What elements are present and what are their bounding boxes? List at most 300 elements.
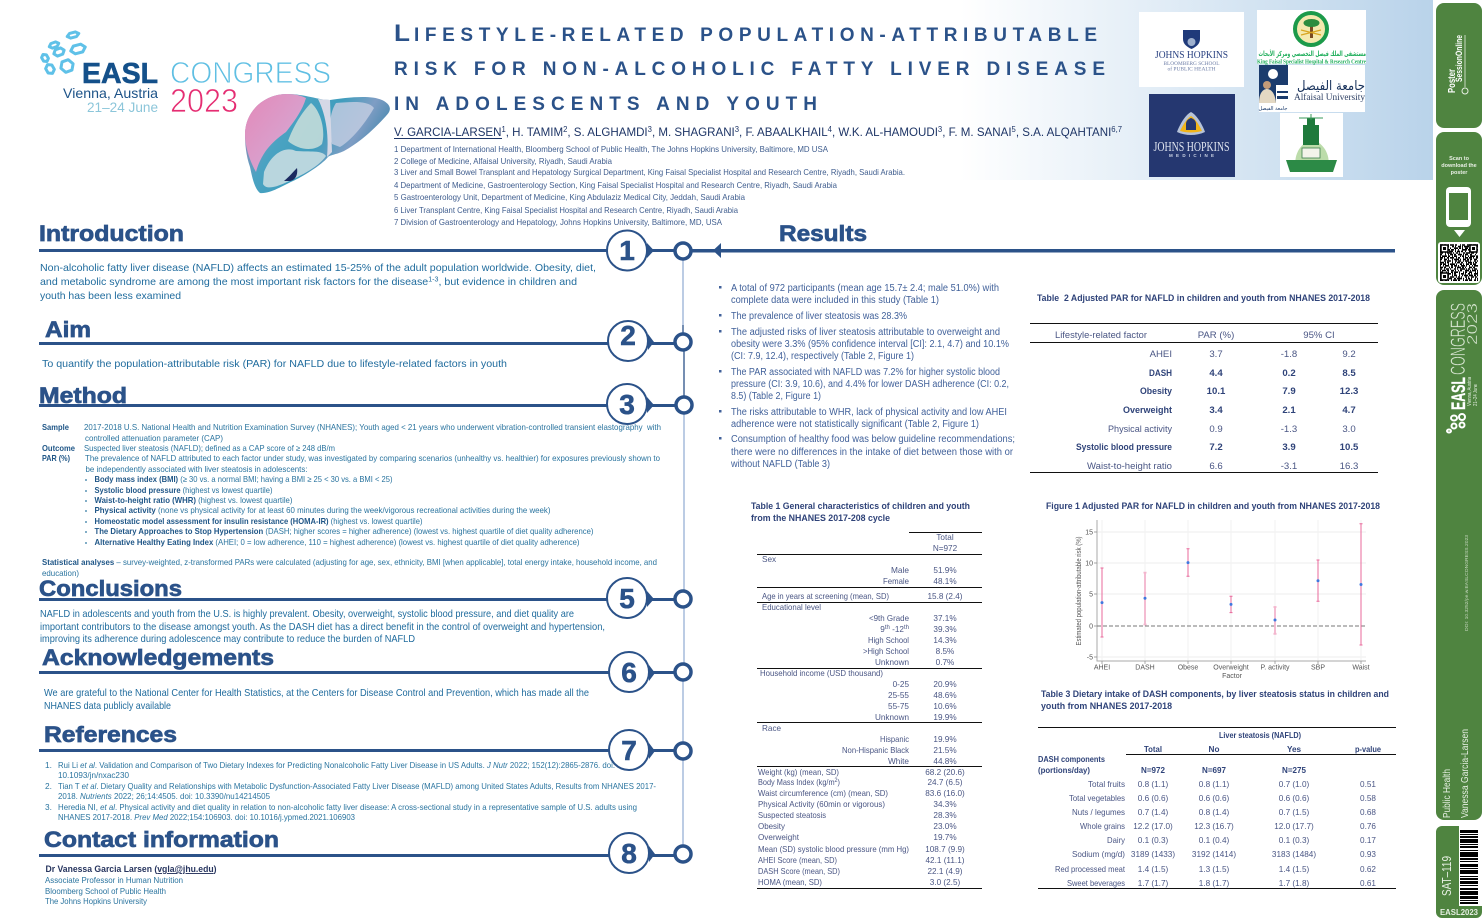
- table 3: dietary intake: 0.68: [1360, 808, 1376, 817]
- sidebar: poster ID and barcode: EASL2023: [1440, 907, 1478, 917]
- table 1: general characteristics: 8.5%: [936, 647, 954, 656]
- table 1: general characteristics: 48.6%: [933, 691, 957, 700]
- table 2: adjusted PAR: 16.3: [1340, 461, 1358, 472]
- number badge 6: 6: [621, 657, 637, 688]
- table 3: dietary intake: p-value: [1355, 745, 1381, 754]
- table 1: general characteristics: Overweight: [758, 833, 800, 842]
- table 3: dietary intake: 1.8 (1.7): [1199, 879, 1230, 888]
- text: method details: education): [42, 568, 79, 578]
- table 3 caption: [1041, 689, 1389, 711]
- text: introduction body: 1-3: [428, 276, 439, 284]
- table 2: adjusted PAR: 95% CI: [1303, 330, 1335, 341]
- table 1: general characteristics: Hispanic: [880, 735, 909, 744]
- table 3: dietary intake: Nuts / legumes: [1072, 808, 1125, 817]
- text: method details: Physical activity (none vs physical activity for at least 60 minutes during the week/vigorous recreational activities during the week): [94, 505, 551, 515]
- affiliations: [394, 144, 905, 227]
- table 1: general characteristics: High School: [868, 636, 909, 645]
- table 1 caption: from the NHANES 2017-208 cycle: [751, 513, 890, 523]
- table 2: adjusted PAR: [1030, 293, 1378, 472]
- text: results bullets: [719, 283, 1015, 470]
- text: results bullets: The prevalence of liver steatosis was 28.3%: [731, 311, 907, 322]
- authors: , M. SHAGRANI: [652, 125, 735, 139]
- table 2: adjusted PAR: Obesity: [1140, 386, 1173, 397]
- table 2: adjusted PAR: 10.5: [1340, 442, 1359, 453]
- axis labels: 10: [1085, 560, 1093, 568]
- EASL Congress logo: Vienna, Austria: [63, 85, 158, 101]
- number badge 2: 2: [620, 320, 636, 351]
- table 2: adjusted PAR: -3.1: [1281, 461, 1297, 472]
- table 2: adjusted PAR: 10.1: [1207, 386, 1226, 397]
- logo: Johns Hopkins Medicine: [1149, 94, 1235, 177]
- table 3: dietary intake: 0.61: [1360, 879, 1376, 888]
- text: reference list: 10.1093/jn/nxac230: [58, 770, 129, 780]
- table 3: dietary intake: 0.76: [1360, 822, 1376, 831]
- table 3: dietary intake: 3189 (1433): [1131, 850, 1175, 859]
- affiliations: 4 Department of Medicine, Gastroenterology Section, King Faisal Specialist Hospital and Research Centre, Riyadh, Saudi Arabia: [394, 180, 837, 190]
- table 1 caption: Table 1 General characteristics of children and youth: [751, 501, 970, 511]
- table 1: general characteristics: AHEI Score (mean, SD): [758, 856, 837, 865]
- table 2: adjusted PAR: -1.8: [1281, 349, 1297, 360]
- text: contact details: Dr Vanessa Garcia Larsen (vgla@jhu.edu): [46, 864, 216, 875]
- sidebar: EASL congress panel: [1436, 290, 1482, 820]
- icon: liver illustration: [245, 94, 390, 193]
- number badge 2: [608, 320, 654, 361]
- rotated congress logo: EASL: [1449, 377, 1470, 410]
- table 3: dietary intake: N=275: [1282, 766, 1306, 775]
- text: results bullets: obesity were 3.3% (95% confidence interval [CI]: 2.1, 4.7) and 10.1%: [731, 339, 1009, 350]
- table 3: dietary intake: Total fruits: [1088, 780, 1125, 789]
- text: reference list: 3.: [45, 802, 52, 812]
- text: method details: Sample: [42, 422, 69, 432]
- table 3: dietary intake: 0.8 (1.1): [1138, 780, 1169, 789]
- logo: Johns Hopkins Medicine: MEDICINE: [1169, 153, 1214, 158]
- logo: Johns Hopkins Bloomberg School: [1139, 12, 1244, 87]
- affiliations: 5 Gastroenterology Unit, Department of Medicine, King Abdulaziz Medical City, Jeddah, Saudi Arabia: [394, 192, 745, 202]
- scan caption: [1441, 156, 1477, 176]
- axis labels: SBP: [1311, 664, 1325, 672]
- table 2: adjusted PAR: AHEI: [1150, 349, 1172, 360]
- table 3: dietary intake: 0.1 (0.4): [1199, 836, 1230, 845]
- table 3: dietary intake: [1038, 689, 1396, 888]
- logo: King Faisal Specialist Hospital: [1257, 10, 1366, 66]
- logo: Johns Hopkins Bloomberg School: of PUBLIC HEALTH: [1168, 66, 1216, 72]
- authors: , F. ABAALKHAIL: [739, 125, 828, 139]
- table 1 caption: [751, 501, 970, 523]
- title: L: [394, 20, 410, 47]
- table 3: dietary intake: Total vegetables: [1069, 794, 1125, 803]
- authors: 6,7: [1111, 125, 1123, 134]
- table 3: dietary intake: Total: [1144, 745, 1162, 754]
- table 3: dietary intake: 0.93: [1360, 850, 1376, 859]
- rotated congress logo: 21–24 June: [1473, 384, 1479, 406]
- text: reference list: 2.: [45, 781, 52, 791]
- table 1: general characteristics: 39.3%: [933, 625, 957, 634]
- EASL Congress logo: 2023: [170, 82, 238, 119]
- header gradient background: [960, 0, 1433, 180]
- section: Method: [39, 383, 692, 578]
- section: Aim: [39, 317, 691, 370]
- table 2: adjusted PAR: Physical activity: [1108, 424, 1172, 435]
- affiliations: 7 Division of Gastroenterology and Hepatology, Johns Hopkins University, Baltimore, MD, USA: [394, 217, 722, 227]
- table 1: general characteristics: 9: [880, 625, 885, 634]
- table 3: dietary intake: 0.8 (1.1): [1199, 780, 1230, 789]
- text: results bullets: complete data were included in this study (Table 1): [731, 295, 939, 306]
- axis labels: [1076, 530, 1370, 680]
- logo: King Faisal Specialist Hospital: مستشفى الملك فيصل التخصصي ومركز الأبحاث: [1259, 49, 1366, 58]
- table 1: general characteristics: 23.0%: [933, 822, 957, 831]
- table 2: adjusted PAR: 0.2: [1282, 368, 1296, 379]
- table 1: general characteristics: 22.1 (4.9): [927, 867, 963, 876]
- heading: Conclusions: Conclusions: [39, 576, 182, 601]
- text: conclusions body: improving its adherence during adolescence may contribute to reduce the burden of NAFLD: [40, 633, 415, 645]
- icon: hexagon cluster: [41, 31, 86, 75]
- text: reference list: Rui Li et al. Validation and Comparison of Two Dietary Indexes for Predicting Nonalcoholic Fatty Liver Disease in US Adults. J Nutr 2022; 152(12):2865-2876. doi:: [58, 760, 615, 770]
- table 1: general characteristics: 68.2 (20.6): [925, 768, 965, 777]
- table 2: adjusted PAR: PAR (%): [1198, 330, 1234, 341]
- table 3: dietary intake: (portions/day): [1038, 766, 1090, 775]
- authors: [394, 125, 1123, 139]
- table 3: dietary intake: 1.3 (1.5): [1199, 865, 1230, 874]
- authors: , S.A. ALQAHTANI: [1016, 125, 1111, 139]
- number badge 5: [607, 578, 654, 618]
- table 1: general characteristics: N=972: [933, 544, 958, 553]
- text: method details: Systolic blood pressure (highest vs lowest quartile): [94, 485, 273, 495]
- table 3: dietary intake: 3192 (1414): [1192, 850, 1236, 859]
- table 3 caption: Table 3 Dietary intake of DASH components, by liver steatosis status in children and: [1041, 689, 1389, 699]
- text: results bullets: Consumption of healthy food was below guideline recommendations;: [731, 434, 1015, 445]
- table 1: general characteristics: th: [885, 625, 890, 631]
- table 2: adjusted PAR: 3.4: [1209, 405, 1223, 416]
- table 3: dietary intake: 1.4 (1.5): [1138, 865, 1169, 874]
- table 2: adjusted PAR: -1.3: [1281, 424, 1297, 435]
- text: method details: 2017-2018 U.S. National Health and Nutrition Examination Survey (NHANES); Youth aged < 21 years who underwent vibration-controlled transient elastography with: [84, 422, 661, 432]
- EASL Congress logo: 21–24 June: [87, 99, 158, 115]
- sidebar: scan QR panel: [1436, 132, 1482, 285]
- table 1: general characteristics: Non-Hispanic Black: [842, 746, 910, 755]
- table 2: adjusted PAR: 0.9: [1209, 424, 1223, 435]
- table 2: adjusted PAR: 3.9: [1282, 442, 1296, 453]
- table 2: adjusted PAR: 7.2: [1209, 442, 1223, 453]
- heading: Method: Method: [39, 383, 127, 408]
- table 3: dietary intake: 1.7 (1.8): [1279, 879, 1310, 888]
- text: results bullets: without NAFLD (Table 3): [730, 459, 830, 470]
- table 3: dietary intake: 12.0 (17.7): [1274, 822, 1314, 831]
- logo: Johns Hopkins Bloomberg School: JOHNS HOPKINS: [1155, 49, 1228, 61]
- table 3: dietary intake: 0.7 (1.5): [1279, 808, 1310, 817]
- authors: , H. TAMIM: [506, 125, 563, 139]
- text: results bullets: pressure (CI: 3.9, 10.6), and 4.4% for lower DASH adherence (CI: 0.2,: [731, 379, 1009, 390]
- authors: 3: [648, 125, 652, 134]
- heading: Introduction: Introduction: [39, 221, 184, 246]
- scan caption: poster: [1451, 170, 1468, 176]
- table 2: adjusted PAR: 7.9: [1282, 386, 1296, 397]
- table 1: general characteristics: 10.6%: [933, 702, 957, 711]
- table 1: general characteristics: Unknown: [875, 658, 909, 667]
- timeline connector: [683, 258, 684, 845]
- table 1: general characteristics: Race: [762, 724, 782, 733]
- table 2: adjusted PAR: 2.1: [1282, 405, 1296, 416]
- table 3: dietary intake: Sodium (mg/d): [1072, 850, 1125, 859]
- table 2: adjusted PAR: 6.6: [1209, 461, 1223, 472]
- table 1: general characteristics: 44.8%: [933, 757, 957, 766]
- table 2: adjusted PAR: Overweight: [1123, 405, 1173, 416]
- axis labels: P. activity: [1260, 664, 1290, 672]
- logo: Alfaisal University: جامعة الفيصل: [1297, 78, 1365, 93]
- text: method details: Statistical analyses – survey-weighted, z-transformed PARs were calculated (adjusting for age, sex, ethnicity, BMI [when applicable], total energy intake, household income, and: [42, 557, 657, 567]
- logo: King Abdulaziz University: [1280, 113, 1343, 177]
- text: reference list: NHANES 2017-2018. Prev Med 2022;154:106903. doi: 10.1016/j.ypmed.2021.106903: [58, 812, 355, 822]
- number badge 5: 5: [619, 583, 635, 614]
- title: RISK FOR NON-ALCOHOLIC FATTY LIVER DISEASE: [394, 59, 1105, 80]
- sidebar: poster ID and barcode: SAT–119: [1439, 856, 1454, 896]
- rotated congress logo: CONGRESS: [1447, 303, 1470, 375]
- text: introduction body: youth has been less examined: [40, 290, 181, 302]
- text: results bullets: (CI: 7.9, 12.4), respectively (Table 2, Figure 1): [731, 351, 914, 362]
- table 3: dietary intake: Dairy: [1107, 836, 1126, 845]
- sidebar: Poster Session Online panel: Poster: [1447, 69, 1458, 93]
- table 3: dietary intake: Yes: [1287, 745, 1301, 754]
- text: contact details: Associate Professor in Human Nutrition: [45, 875, 183, 885]
- text: method details: Homeostatic model assessment for insulin resistance (HOMA-IR) (highest vs. lowest quartile): [94, 516, 423, 526]
- table 3: dietary intake: DASH components: [1038, 755, 1105, 764]
- DOI text: DOI: 10.3252/pe.w.EASLCONGRESS.2023: [1464, 535, 1470, 631]
- table 3: dietary intake: 3183 (1484): [1272, 850, 1316, 859]
- heading: References: References: [44, 722, 177, 747]
- table 3: dietary intake: 12.2 (17.0): [1133, 822, 1173, 831]
- text: method details: The prevalence of NAFLD attributed to each factor under study, was investigated by comparing scenarios (unhealthy vs. healthier) for exposures previously shown to: [85, 453, 660, 463]
- text: contact details: The Johns Hopkins University: [45, 896, 148, 906]
- rotated congress logo: 2023: [1464, 303, 1481, 345]
- table 1: general characteristics: Physical Activity (60min or vigorous): [758, 800, 885, 809]
- number badge 1: 1: [619, 235, 635, 266]
- table 1: general characteristics: 14.3%: [933, 636, 957, 645]
- text: method details: Outcome: [42, 443, 75, 453]
- text: reference list: Tian T et al. Dietary Quality and Relationships with Metabolic Dysfunction-Associated Fatty Liver Disease (MAFLD) among United States Adults, Results from NHANES 2017-: [58, 781, 656, 791]
- text: conclusions body: [40, 608, 605, 645]
- EASL Congress logo: [41, 31, 331, 119]
- sidebar: Poster Session Online panel: SessionOnline: [1454, 35, 1464, 82]
- authors: 5: [1012, 125, 1016, 134]
- table 2: adjusted PAR: Systolic blood pressure: [1076, 442, 1172, 453]
- table 1: general characteristics: White: [888, 757, 909, 766]
- section: Acknowledgements: [39, 645, 691, 712]
- table 1: general characteristics: 42.1 (11.1): [926, 856, 965, 865]
- table 2: adjusted PAR: Waist-to-height ratio: [1087, 461, 1172, 472]
- table 3: dietary intake: 0.17: [1360, 836, 1376, 845]
- point estimates: [1100, 561, 1362, 622]
- text: results bullets: The PAR associated with NAFLD was 7.2% for higher systolic blood: [731, 367, 1000, 378]
- table 1: general characteristics: Male: [891, 566, 909, 575]
- text: method details: Waist-to-height ratio (WHR) (highest vs. lowest quartile): [94, 495, 293, 505]
- table 1: general characteristics: >High School: [863, 647, 909, 656]
- number badge 1: [607, 230, 654, 270]
- table 1: general characteristics: Age in years at screening (mean, SD): [762, 592, 889, 601]
- figure 1 caption: Figure 1 Adjusted PAR for NAFLD in children and youth from NHANES 2017-2018: [1046, 501, 1380, 511]
- axis labels: Overweight: [1213, 664, 1249, 672]
- section: Contact information: [39, 827, 691, 906]
- text: reference list: Heredia NI, et al. Physical activity and diet quality in relation to non-alcoholic fatty liver disease: A cross-sectional study in a representative sample of U.S. adults using: [58, 802, 637, 812]
- text: method details: [42, 422, 661, 578]
- sidebar: poster ID and barcode: [1436, 826, 1482, 918]
- text: method details: Alternative Healthy Eating Index (AHEI; 0 = low adherence, 110 = highest adherence) (lowest vs. highest quartile of diet quality adherence): [94, 537, 580, 547]
- number badge 7: 7: [621, 735, 637, 766]
- table 3: dietary intake: 0.7 (1.4): [1138, 808, 1169, 817]
- table 1: general characteristics: 34.3%: [933, 800, 957, 809]
- text: introduction body: , but evidence in children and: [438, 276, 577, 288]
- table 3: dietary intake: No: [1209, 745, 1219, 754]
- axis labels: Estimated population-attributable risk (%): [1076, 536, 1083, 646]
- EASL Congress logo: EASL: [82, 58, 158, 90]
- authors: 3: [938, 125, 943, 134]
- authors: V. GARCIA-LARSEN: [394, 125, 506, 139]
- text: results bullets: there were no differences in the intake of diet between those with or: [731, 447, 1014, 458]
- text: results bullets: adherence were not statistically significant (Table 2, Figure 1): [731, 419, 979, 430]
- table 1: general characteristics: 25-55: [888, 691, 909, 700]
- table 3: dietary intake: N=972: [1141, 766, 1165, 775]
- authors: , S. ALGHAMDI: [567, 125, 648, 139]
- table 3: dietary intake: 0.6 (0.6): [1279, 794, 1310, 803]
- table 1: general characteristics: -12: [890, 625, 904, 634]
- figure 1: PAR error-bar chart: [1046, 501, 1380, 680]
- table 1: general characteristics: [751, 501, 982, 888]
- table 3: dietary intake: 12.3 (16.7): [1194, 822, 1234, 831]
- topic and author: Vanessa Garcia-Larsen: [1459, 729, 1471, 818]
- table 3: dietary intake: 0.51: [1360, 780, 1376, 789]
- table 1: general characteristics: HOMA (mean, SD): [758, 878, 822, 887]
- table 1: general characteristics: <9th Grade: [869, 614, 909, 623]
- table 1: general characteristics: 28.3%: [933, 811, 957, 820]
- table 2: adjusted PAR: 12.3: [1340, 386, 1358, 397]
- rotated congress logo: Vienna, Austria: [1467, 376, 1473, 406]
- axis labels: 15: [1085, 530, 1093, 536]
- error bars: [1100, 524, 1362, 645]
- table 3: dietary intake: Whole grains: [1080, 822, 1125, 831]
- table 1: general characteristics: 21.5%: [933, 746, 957, 755]
- text: acknowledgements body: NHANES data publicly available: [44, 700, 171, 712]
- table 2: adjusted PAR: 9.2: [1342, 349, 1356, 360]
- table 3: dietary intake: 0.62: [1360, 865, 1376, 874]
- table 1: general characteristics: Waist circumference (cm) (mean, SD): [758, 789, 888, 798]
- text: introduction body: [40, 262, 596, 302]
- authors: 3: [735, 125, 740, 134]
- text: method details: PAR (%): [42, 453, 70, 463]
- table 1: general characteristics: 24.7 (6.5): [927, 778, 963, 787]
- table 1: general characteristics: 19.9%: [933, 735, 957, 744]
- authors: 2: [563, 125, 568, 134]
- table 1: general characteristics: th: [904, 625, 909, 631]
- affiliations: 2 College of Medicine, Alfaisal University, Riyadh, Saudi Arabia: [394, 156, 612, 166]
- axis labels: AHEI: [1094, 664, 1110, 672]
- table 1: general characteristics: 0-25: [893, 680, 909, 689]
- logo: Alfaisal University: جامعة الفيصل: [1258, 106, 1288, 112]
- authors: 1: [501, 125, 506, 134]
- text: method details: The Dietary Approaches to Stop Hypertension (DASH; higher scores = higher adherence) (lowest vs. highest quartile of diet quality adherence): [94, 526, 594, 536]
- text: contact details: Bloomberg School of Public Health: [45, 886, 166, 896]
- text: conclusions body: NAFLD in adolescents and youth from the U.S. is highly prevalent. Obesity, overweight, systolic blood pressure, and diet quality are: [40, 608, 574, 620]
- table 3: dietary intake: 0.8 (1.4): [1199, 808, 1230, 817]
- text: aim body: To quantify the population-attributable risk (PAR) for NAFLD due to lifestyle-related factors in youth: [42, 358, 507, 370]
- topic and author: [1441, 729, 1471, 818]
- text: method details: Body mass index (BMI) (≥ 30 vs. a normal BMI; having a BMI ≥ 25 < 30 vs. a BMI < 25): [94, 474, 393, 484]
- table 3: dietary intake: 0.6 (0.6): [1138, 794, 1169, 803]
- table 1: general characteristics: Sex: [762, 555, 776, 564]
- logo: King Faisal Specialist Hospital: King Faisal Specialist Hospital & Research Centre: [1257, 60, 1366, 66]
- rotated congress logo: [1447, 303, 1481, 432]
- text: method details: controlled attenuation parameter (CAP): [85, 433, 223, 443]
- table 1: general characteristics: 15.8 (2.4): [927, 592, 963, 601]
- heading: Results: Results: [779, 221, 867, 246]
- table 1: general characteristics: Total: [936, 533, 954, 542]
- number badge 7: [609, 730, 655, 770]
- title: IFESTYLE-RELATED POPULATION-ATTRIBUTABLE: [414, 25, 1097, 46]
- heading: Acknowledgements: Acknowledgements: [42, 645, 274, 670]
- axis labels: DASH: [1135, 664, 1155, 672]
- icon: phone: [1446, 187, 1471, 237]
- axis labels: Factor: [1222, 673, 1243, 680]
- axis labels: Waist: [1352, 664, 1370, 672]
- table 2: adjusted PAR: 3.0: [1342, 424, 1356, 435]
- QR code: [1438, 242, 1480, 283]
- table 2 caption: Table 2 Adjusted PAR for NAFLD in children and youth from NHANES 2017-2018: [1037, 293, 1370, 303]
- table 3: dietary intake: Liver steatosis (NAFLD): [1219, 731, 1301, 740]
- table 1: general characteristics: ): [838, 778, 840, 787]
- table 2: adjusted PAR: DASH: [1149, 368, 1172, 379]
- number badge 8: [609, 833, 655, 873]
- table 3: dietary intake: Sweet beverages: [1067, 879, 1125, 888]
- text: results bullets: A total of 972 participants (mean age 15.7± 2.4; male 51.0%) with: [731, 283, 999, 294]
- axis labels: 5: [1089, 592, 1093, 598]
- title: [394, 20, 1105, 115]
- table 1: general characteristics: 2: [835, 778, 838, 784]
- table 1: general characteristics: 108.7 (9.9): [925, 845, 965, 854]
- axis labels: Obese: [1178, 664, 1198, 672]
- table 2: adjusted PAR: Lifestyle-related factor: [1055, 330, 1148, 341]
- axis labels: -5: [1087, 654, 1093, 662]
- text: method details: be independently associated with liver steatosis in adolescents:: [86, 464, 308, 474]
- text: method details: Suspected liver steatosis (NAFLD); defined as a CAP score of ≥ 248 dB/m: [84, 443, 335, 453]
- table 1: general characteristics: 19.9%: [933, 713, 957, 722]
- arrow: results rule: [691, 243, 1395, 258]
- topic and author: Public Health: [1441, 769, 1453, 818]
- table 3: dietary intake: 1.4 (1.5): [1279, 865, 1310, 874]
- table 1: general characteristics: 51.9%: [933, 566, 957, 575]
- table 1: general characteristics: 19.7%: [933, 833, 957, 842]
- logo: Alfaisal University: Alfaisal University: [1294, 92, 1366, 102]
- axis labels: 0: [1089, 624, 1093, 630]
- table 2: adjusted PAR: 4.7: [1342, 405, 1356, 416]
- table 1: general characteristics: 48.1%: [933, 577, 957, 586]
- logo: Johns Hopkins Medicine: JOHNS HOPKINS: [1154, 140, 1230, 155]
- table 1: general characteristics: 20.9%: [933, 680, 957, 689]
- table 1: general characteristics: Mean (SD) systolic blood pressure (mm Hg): [758, 845, 909, 854]
- table 2: adjusted PAR: 4.4: [1209, 368, 1223, 379]
- text: conclusions body: important contributors to the disease amongst youth. As the DASH diet has a direct benefit in the control of overweight and hypertension,: [40, 621, 605, 633]
- table 3 caption: youth from NHANES 2017-2018: [1041, 701, 1172, 711]
- text: reference list: 1.: [45, 760, 52, 770]
- table 3: dietary intake: 0.1 (0.3): [1138, 836, 1169, 845]
- table 3: dietary intake: Red processed meat: [1055, 865, 1126, 874]
- section: Results: [691, 221, 1395, 470]
- table 1: general characteristics: Household income (USD thousand): [760, 669, 883, 678]
- EASL Congress logo: CONGRESS: [170, 55, 331, 90]
- table 1: general characteristics: DASH Score (mean, SD): [758, 867, 840, 876]
- table 1: general characteristics: Female: [883, 577, 909, 586]
- text: contact details: [45, 864, 216, 906]
- text: reference list: 2018. Nutrients 2022; 26;14:4505. doi: 10.3390/nu14214505: [58, 791, 270, 801]
- number badge 3: [607, 384, 654, 424]
- heading: Aim: Aim: [45, 317, 91, 342]
- affiliations: 6 Liver Transplant Centre, King Faisal Specialist Hospital and Research Centre, Riyadh, Saudi Arabia: [394, 205, 738, 215]
